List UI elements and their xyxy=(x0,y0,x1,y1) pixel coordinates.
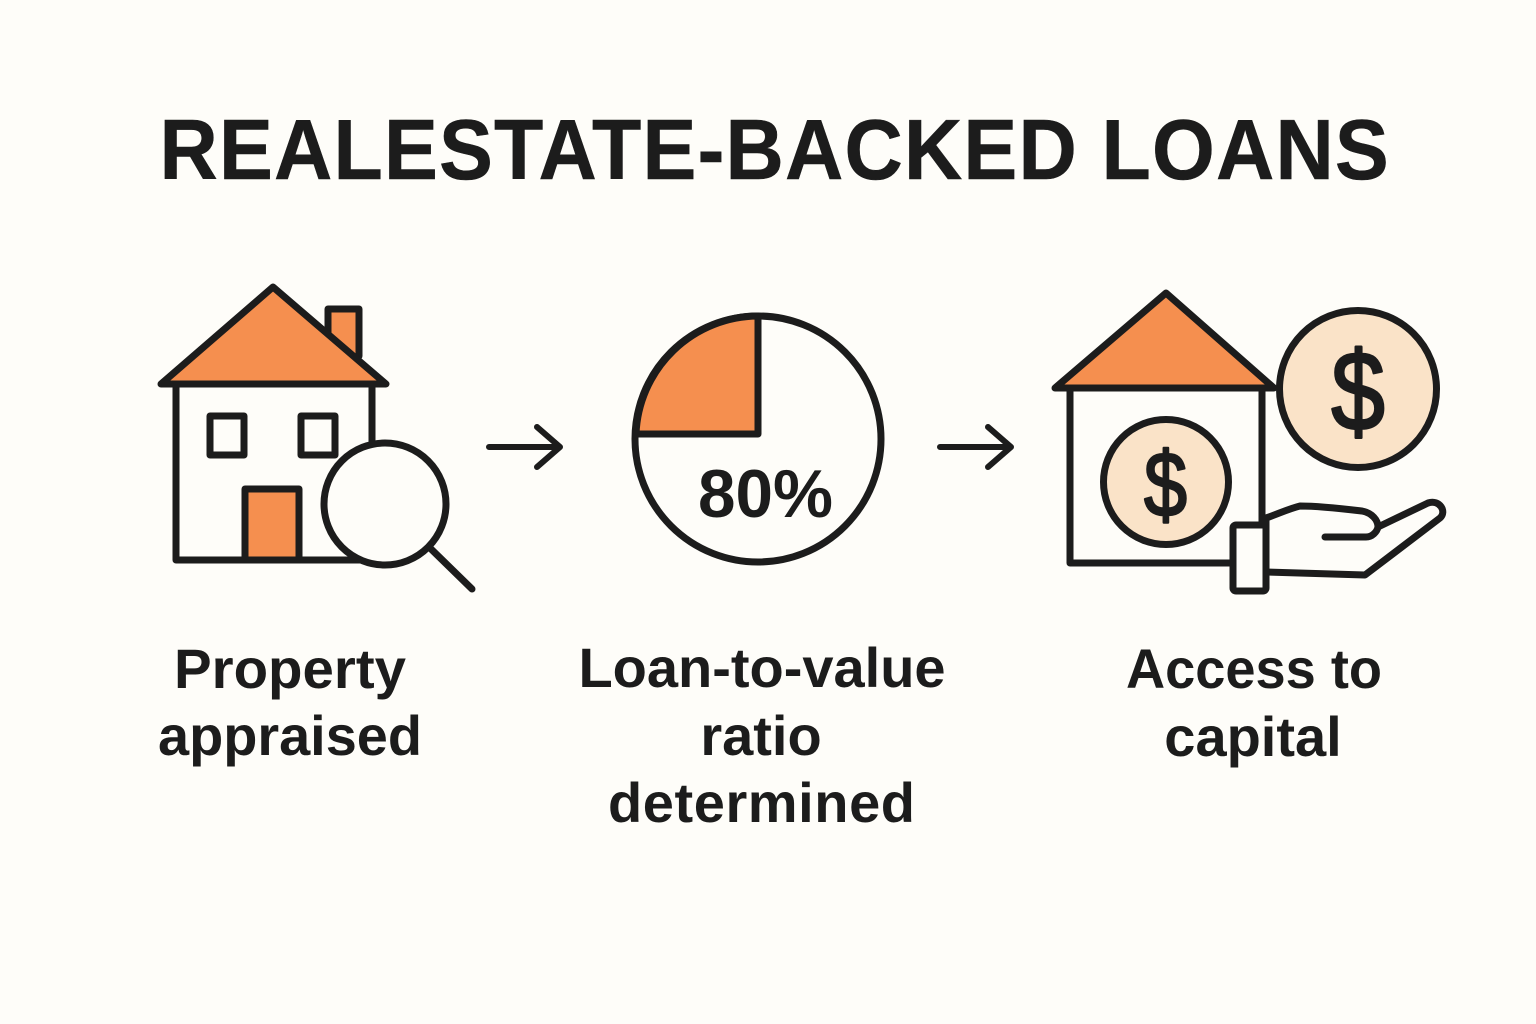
label: loan-to-value ratio determined: determined xyxy=(608,771,915,834)
label: access to capital xyxy=(1126,637,1382,768)
label: access to capital: capital xyxy=(1164,705,1342,768)
label: loan-to-value ratio determined xyxy=(578,636,946,834)
small dollar sign: $ xyxy=(1144,434,1187,537)
chart: loan-to-value pie xyxy=(635,316,881,562)
icon: house with magnifying glass xyxy=(161,287,472,589)
arrow: step two to three xyxy=(940,427,1011,467)
title: REALESTATE-BACKED LOANS xyxy=(160,102,1389,197)
pie value: 80% xyxy=(698,456,833,532)
icon: house with coins and hand xyxy=(1055,293,1443,591)
label: loan-to-value ratio determined: ratio xyxy=(700,704,822,767)
large dollar sign: $ xyxy=(1331,329,1385,455)
label: property appraised: appraised xyxy=(158,704,422,767)
label: property appraised xyxy=(158,637,422,767)
label: access to capital: Access to xyxy=(1126,637,1382,700)
label: loan-to-value ratio determined: Loan-to-value xyxy=(578,636,946,699)
label: property appraised: Property xyxy=(174,637,406,700)
arrow: step one to two xyxy=(489,427,560,467)
